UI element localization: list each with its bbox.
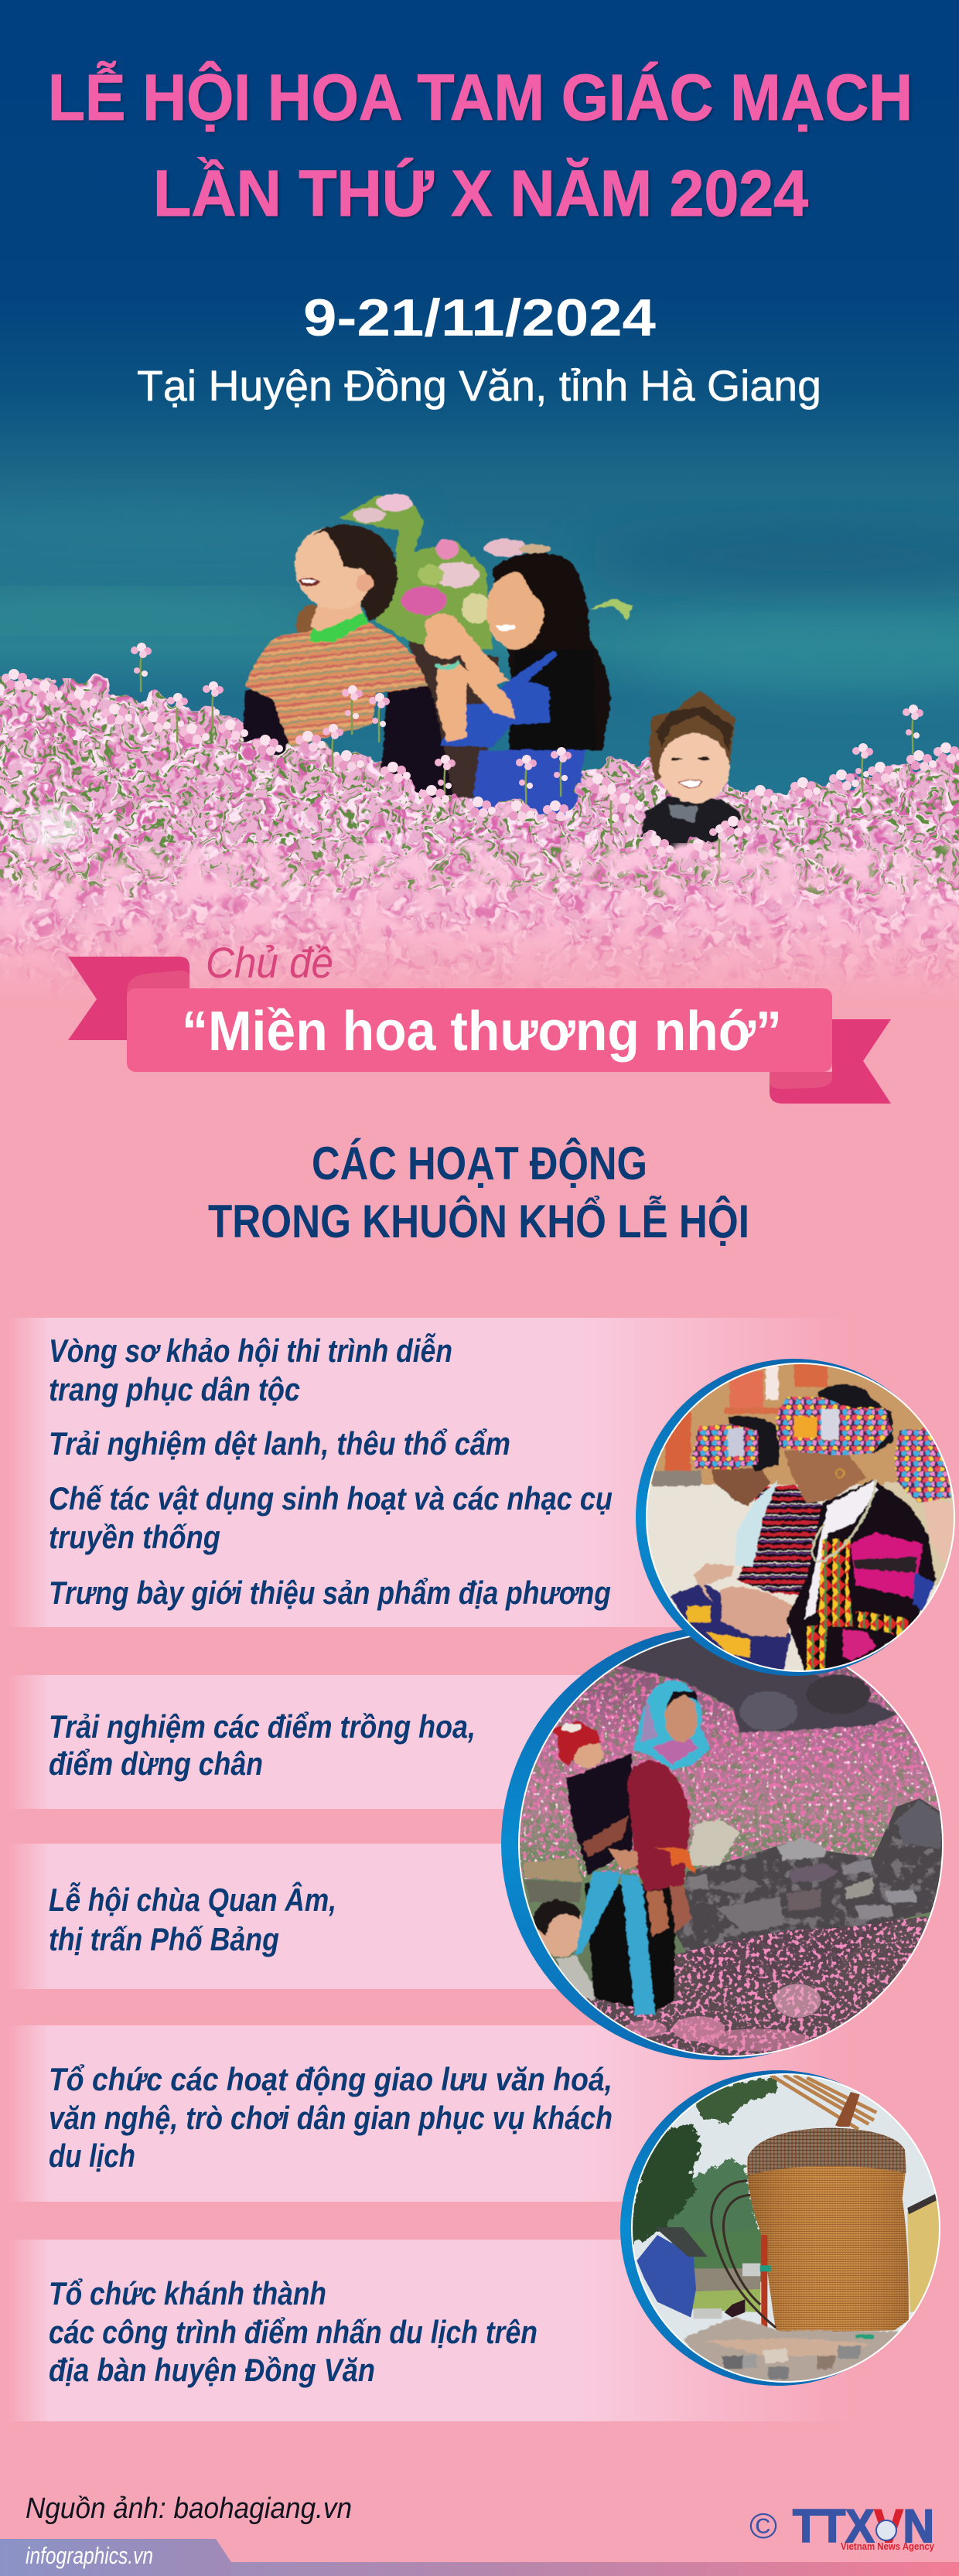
agency name: Vietnam News Agency <box>841 2540 935 2552</box>
activity 5 <box>49 2275 538 2388</box>
flower bunch <box>340 493 633 650</box>
activity 4: Tổ chức các hoạt động giao lưu văn hoá, <box>49 2061 613 2097</box>
location: Tại Huyện Đồng Văn, tỉnh Hà Giang <box>137 361 821 410</box>
white edge <box>518 1632 944 2057</box>
activity 5: Tổ chức khánh thành <box>49 2275 326 2312</box>
activity 3: thị trấn Phố Bảng <box>49 1921 279 1957</box>
belt <box>654 1848 696 1875</box>
necklace <box>812 1479 875 1562</box>
wordmark: TTXVN <box>793 2500 934 2552</box>
hero photo: children in buckwheat flower field <box>0 0 959 1083</box>
carrier <box>566 1753 632 1875</box>
footer bar <box>0 2539 959 2576</box>
hands <box>693 1564 735 1603</box>
blossoms over legs <box>626 1984 821 2052</box>
girl in embroidered blouse <box>242 524 460 802</box>
activity 4: du lịch <box>49 2138 135 2174</box>
activity list 1: Vòng sơ khảo hội thi trình diễn <box>49 1332 452 1369</box>
fade of photo into pink background <box>0 843 959 1083</box>
blue ring <box>501 1627 934 2060</box>
activity 3: Lễ hội chùa Quan Âm, <box>49 1881 336 1919</box>
footer tab <box>0 2539 231 2576</box>
activity 5: địa bàn huyện Đồng Văn <box>49 2352 375 2388</box>
white edge <box>631 2073 940 2383</box>
fabric in lap <box>671 1583 791 1670</box>
children <box>242 493 742 848</box>
date: 9-21/11/2024 <box>303 288 656 347</box>
title: LỄ HỘI HOA TAM GIÁC MẠCH <box>48 61 913 134</box>
theme name: “Miền hoa thương nhớ” <box>182 1001 782 1063</box>
activity 4: văn nghệ, trò chơi dân gian phục vụ khách <box>49 2100 613 2136</box>
ribbon shape <box>68 957 891 1104</box>
curved handles <box>712 2181 776 2328</box>
child <box>556 1956 597 2001</box>
arms <box>647 1890 670 1936</box>
circle photo: giant woven basket landmark <box>611 2065 951 2397</box>
background <box>626 1353 959 1490</box>
activity 2: Trải nghiệm các điểm trồng hoa, <box>49 1708 476 1745</box>
face <box>665 1694 698 1742</box>
floret clusters and sprigs <box>2 643 959 874</box>
title <box>48 61 913 230</box>
front headdress <box>817 1384 893 1454</box>
baby <box>572 1740 603 1768</box>
activity 2 <box>49 1708 476 1782</box>
globe <box>876 2520 896 2540</box>
circle photo: mother with child in flower field <box>501 1624 951 2074</box>
photo scene <box>520 1637 942 2056</box>
bamboo frame <box>771 2075 876 2129</box>
mountain <box>663 2158 766 2281</box>
blurred foreground blossoms <box>0 806 959 1005</box>
circle photo: Lô Lô women embroidering <box>626 1353 959 1691</box>
activity list 1 <box>49 1332 613 1611</box>
section heading: CÁC HOẠT ĐỘNG <box>312 1138 647 1189</box>
activity bands <box>8 1318 851 2421</box>
scarf <box>633 1680 710 1770</box>
bottom flowers <box>582 1916 928 2056</box>
activity 4 <box>49 2061 613 2174</box>
website: infographics.vn <box>26 2542 153 2569</box>
copyright symbol: © <box>749 2506 777 2546</box>
photo scene <box>611 2065 951 2397</box>
flower meadow texture <box>510 1624 951 2065</box>
footer strip <box>0 2562 959 2576</box>
section heading <box>208 1138 749 1247</box>
section heading: TRONG KHUÔN KHỔ LỄ HỘI <box>208 1196 749 1247</box>
TTXVN logo <box>749 2500 935 2552</box>
mother, baby and child <box>534 1680 710 2015</box>
blue ring <box>636 1359 953 1676</box>
sweater <box>627 1760 690 1891</box>
white edge <box>646 1363 955 1672</box>
pants <box>585 1882 675 2012</box>
theme label: Chủ đề <box>206 938 333 987</box>
dark top rocks <box>611 1636 896 1732</box>
activity 5: các công trình điểm nhấn du lịch trên <box>49 2314 538 2350</box>
back woman <box>737 1485 825 1595</box>
activity list 1: Trải nghiệm dệt lanh, thêu thổ cẩm <box>49 1425 510 1462</box>
sky <box>611 2065 951 2397</box>
title: LẦN THỨ X NĂM 2024 <box>153 157 808 230</box>
sky and blurred hills <box>0 0 959 851</box>
stone base <box>683 2318 899 2382</box>
back field <box>0 674 956 851</box>
photo scene <box>626 1353 959 1691</box>
blue ring <box>620 2070 936 2386</box>
activity 3 <box>49 1881 336 1957</box>
activity list 1: trang phục dân tộc <box>49 1371 300 1407</box>
third woman <box>923 1498 954 1562</box>
rock pile <box>675 1799 942 1953</box>
theme ribbon <box>68 938 891 1104</box>
activity list 1: Trưng bày giới thiệu sản phẩm địa phương <box>49 1575 611 1611</box>
front field <box>2 716 959 905</box>
photo source credit: Nguồn ảnh: baohagiang.vn <box>26 2492 352 2525</box>
yellow house <box>907 2195 941 2312</box>
little boy <box>639 691 742 848</box>
activity list 1: truyền thống <box>49 1519 220 1555</box>
front woman jacket <box>787 1479 936 1670</box>
basket <box>747 2128 909 2333</box>
girl in blue apron <box>424 553 610 822</box>
activity list 1: Chế tác vật dụng sinh hoạt và các nhạc cụ <box>49 1480 613 1517</box>
village and grass <box>694 2268 760 2291</box>
tarp shelter <box>636 2235 696 2318</box>
front face <box>783 1450 866 1503</box>
apron <box>575 1871 620 1956</box>
back basket strip <box>408 642 499 799</box>
activity 2: điểm dừng chân <box>49 1745 263 1782</box>
red pole <box>761 2235 767 2332</box>
tree <box>626 2078 779 2245</box>
